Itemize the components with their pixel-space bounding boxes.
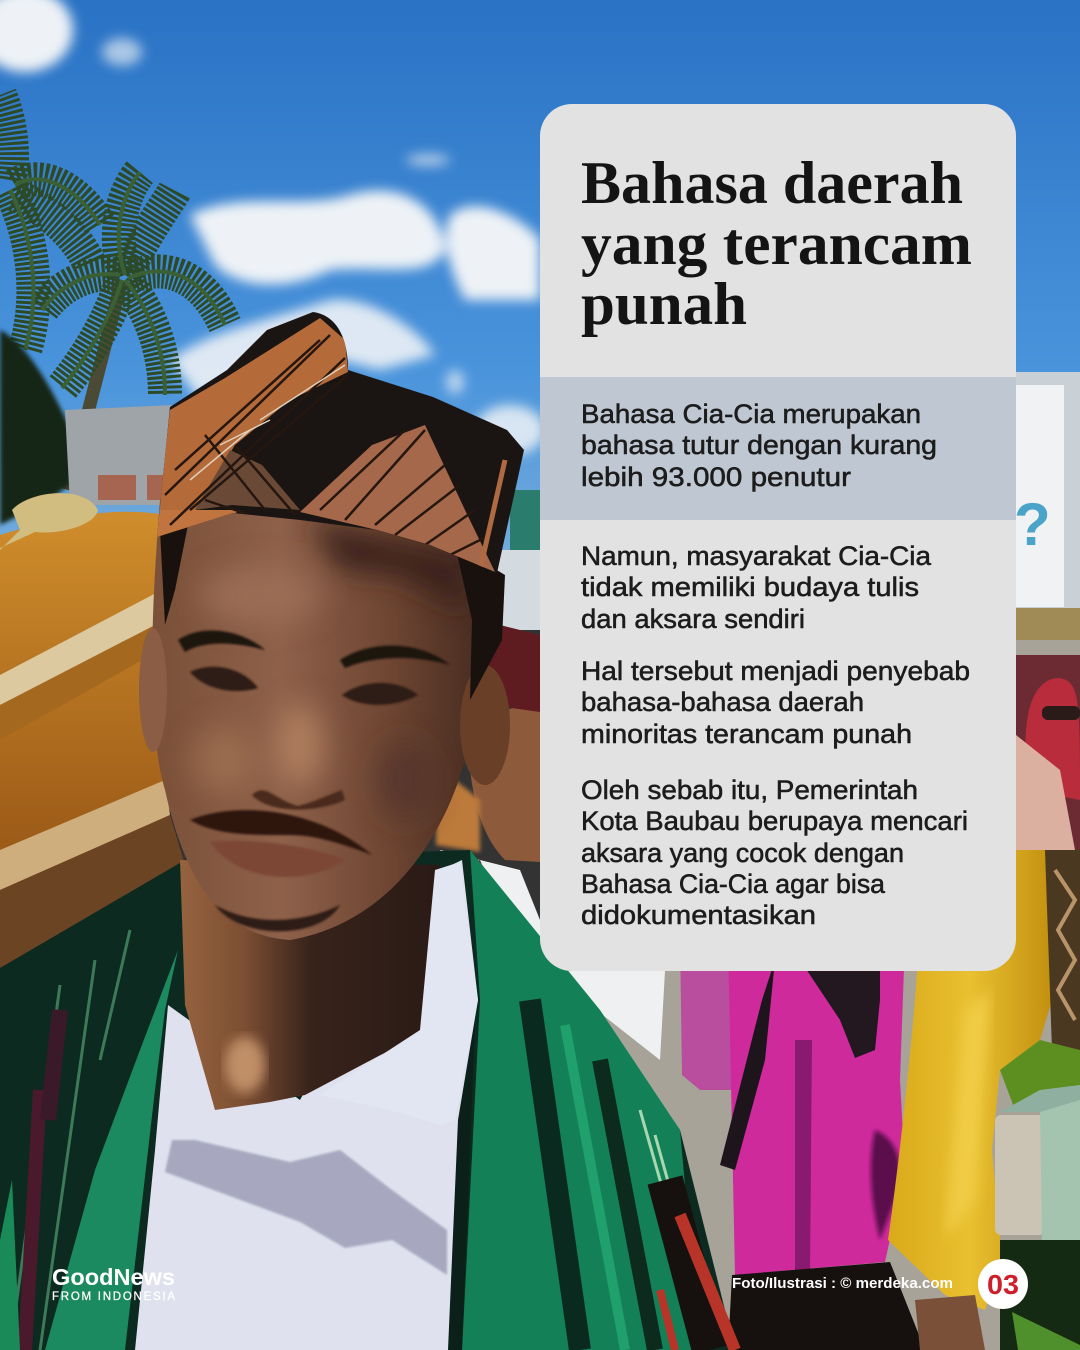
shirt shadow xyxy=(165,1140,447,1275)
facial features xyxy=(178,631,450,931)
paragraph: cause: Hal tersebut menjadi penyebab xyxy=(581,656,970,686)
sign behind panel edge xyxy=(510,490,540,550)
dark embroidered skirt xyxy=(728,1262,925,1350)
ear xyxy=(139,628,167,752)
handbag xyxy=(995,1115,1045,1235)
yellow garment figure xyxy=(888,850,1052,1310)
logo: GoodNews From Indonesia: FROM INDONESIA xyxy=(52,1291,175,1303)
ground at lower right xyxy=(1000,1240,1080,1350)
logo: GoodNews From Indonesia: GoodNews xyxy=(52,1264,175,1290)
orange plaid lower right xyxy=(300,425,495,572)
page number badge: 03 xyxy=(987,1269,1019,1300)
neck highlight xyxy=(225,1037,265,1093)
headwear: batik cap xyxy=(155,312,524,573)
paragraph: government effort: didokumentasikan xyxy=(581,900,816,930)
panel background xyxy=(540,104,1016,971)
front band orange left xyxy=(157,510,240,537)
info panel xyxy=(540,104,1016,971)
plaid stripes xyxy=(165,335,490,555)
clouds xyxy=(0,0,545,455)
title xyxy=(581,150,972,337)
paragraph: government effort: Bahasa Cia-Cia agar bisa xyxy=(581,869,886,899)
title: Bahasa daerah xyxy=(581,150,963,216)
paragraph: highlighted fact: lebih 93.000 penutur xyxy=(581,462,851,492)
forehead shadow and highlights xyxy=(193,520,470,820)
sky xyxy=(0,0,1080,620)
orange plaid upper left xyxy=(155,318,348,540)
paragraph: cause: minoritas terancam punah xyxy=(581,719,912,749)
boy in white xyxy=(440,850,665,1060)
paragraph: government effort xyxy=(581,775,968,930)
scarf and body xyxy=(0,850,735,1350)
paragraph: cause xyxy=(581,656,970,749)
paragraph: highlighted fact: Bahasa Cia-Cia merupakan xyxy=(581,399,921,429)
page number badge xyxy=(978,1259,1028,1309)
photo credit: Foto/Ilustrasi : © merdeka.com xyxy=(732,1276,953,1292)
paragraph: government effort: Kota Baubau berupaya mencari xyxy=(581,806,968,836)
palm trees xyxy=(0,95,225,490)
brown plaid middle xyxy=(195,450,300,510)
paragraph: government effort: Oleh sebab itu, Pemerintah xyxy=(581,775,918,805)
pink garment figures xyxy=(680,940,732,1090)
right scarf: stripes xyxy=(455,850,735,1350)
hair xyxy=(160,525,188,625)
patterned strap xyxy=(1045,850,1080,1050)
face xyxy=(152,500,476,940)
street ground xyxy=(540,640,1080,1350)
paragraph: government effort: aksara yang cocok dengan xyxy=(581,838,904,868)
hand xyxy=(915,1295,985,1350)
title: yang terancam xyxy=(581,211,972,277)
white shirt xyxy=(135,860,478,1350)
paragraph: no written culture xyxy=(581,541,932,634)
paragraph: no written culture: Namun, masyarakat Cia-Cia xyxy=(581,541,932,571)
dark tree at left xyxy=(0,330,88,525)
wooden drum xyxy=(0,512,170,960)
neck xyxy=(180,860,440,1110)
paragraph: highlighted fact xyxy=(581,399,937,492)
paragraph: no written culture: tidak memiliki budaya tulis xyxy=(581,572,919,602)
right building and banner xyxy=(1016,372,1080,662)
logo: GoodNews From Indonesia xyxy=(52,1264,175,1303)
building behind hat xyxy=(65,405,175,505)
highlighted band xyxy=(540,377,1016,520)
paragraph: cause: bahasa-bahasa daerah xyxy=(581,687,864,717)
drum rope knot xyxy=(0,493,98,550)
paragraph: highlighted fact: bahasa tutur dengan kurang xyxy=(581,430,937,460)
left scarf: stripes and bright band xyxy=(0,930,178,1350)
question mark on banner: ? xyxy=(1014,491,1051,558)
green blouse patch xyxy=(1000,1040,1080,1110)
collar xyxy=(320,862,478,1125)
title: punah xyxy=(581,271,747,337)
woman in red at right xyxy=(1016,655,1080,855)
paragraph: no written culture: dan aksara sendiri xyxy=(581,604,805,634)
